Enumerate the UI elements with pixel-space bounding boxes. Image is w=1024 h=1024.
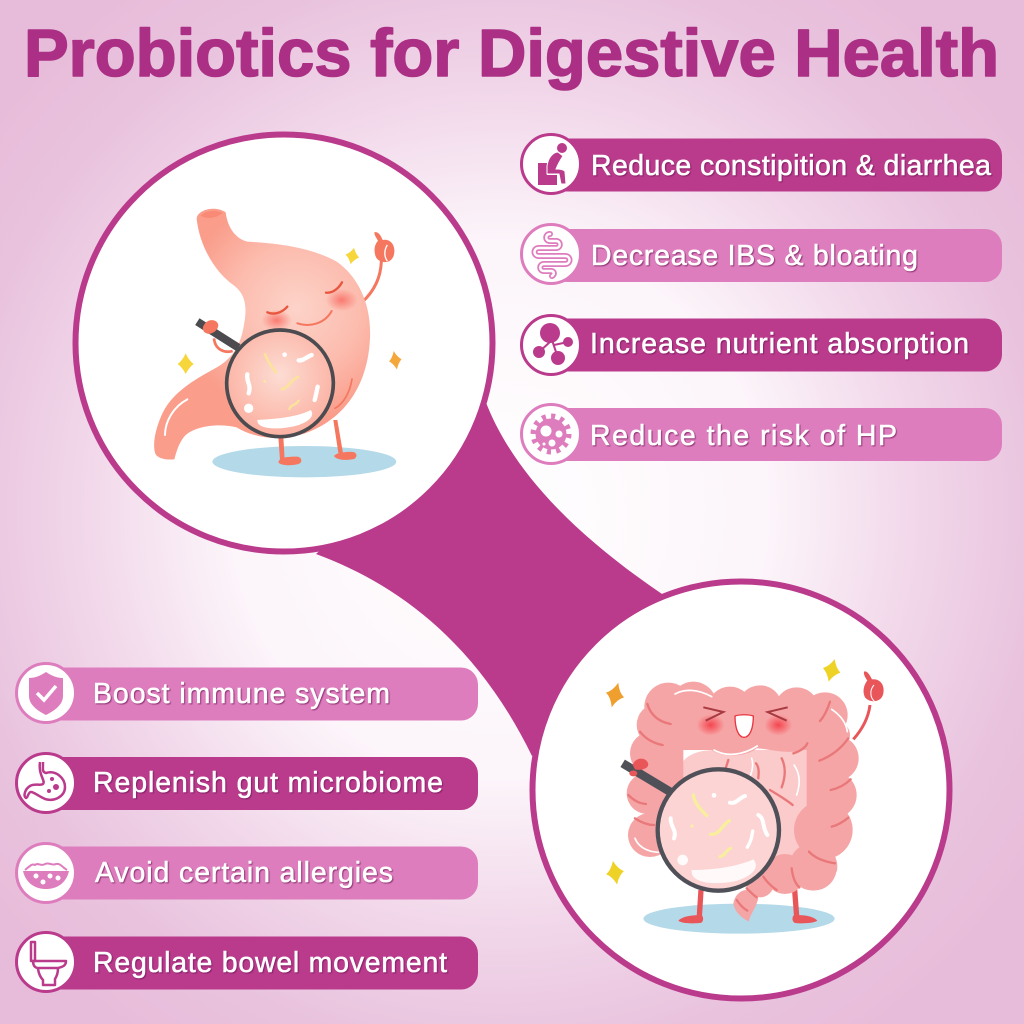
benefit: decrease IBS	[522, 224, 1002, 284]
face	[697, 707, 792, 737]
title: Probiotics for Digestive Health	[24, 16, 999, 91]
icon: toilet	[16, 932, 76, 992]
benefit: reduce risk of HP	[522, 404, 1002, 464]
raised arm with thumb up	[853, 671, 884, 739]
large intestine	[627, 682, 859, 922]
panel: intestine circle	[532, 582, 950, 998]
label: Regulate bowel movement	[93, 947, 447, 979]
icon: molecule	[522, 316, 580, 374]
benefit: boost immune system	[16, 664, 478, 722]
magnifying glass	[623, 759, 779, 891]
pill bar	[45, 757, 478, 810]
illustration: stomach character	[154, 209, 403, 477]
pill bar	[45, 668, 478, 720]
magnifying glass	[197, 322, 333, 437]
icon: shield	[16, 664, 76, 722]
benefit: increase nutrient absorption	[522, 316, 1002, 374]
hand holding glass	[203, 320, 233, 352]
pill bar	[550, 138, 1002, 192]
intestine highlights	[635, 690, 847, 891]
icon: intestines	[522, 224, 580, 284]
benefit: reduce constipation	[522, 134, 1002, 194]
label: Reduce the risk of HP	[590, 420, 897, 452]
legs and feet	[278, 420, 356, 465]
icon: stomach	[16, 754, 76, 812]
stomach body	[154, 209, 370, 460]
illustration: intestine character	[603, 657, 884, 934]
icon: allergy bowl	[16, 844, 76, 902]
raised arm with thumb up	[363, 232, 394, 302]
pill bar	[550, 229, 1002, 282]
connector between circles	[316, 400, 662, 756]
label: Avoid certain allergies	[95, 857, 393, 889]
label: Reduce constipition & diarrhea	[591, 150, 991, 182]
intestine fold marks	[628, 702, 851, 911]
ground shadow	[212, 446, 396, 477]
benefit: replenish gut microbiome	[16, 754, 478, 812]
legs and feet	[678, 890, 817, 923]
pill bar	[550, 318, 1002, 372]
label: Replenish gut microbiome	[93, 767, 443, 799]
pill bar	[550, 408, 1002, 461]
pill bar	[45, 936, 478, 990]
icon: person on toilet	[522, 134, 580, 194]
icon: virus	[522, 404, 580, 464]
benefit: regulate bowel movement	[16, 932, 478, 992]
pill bar	[45, 846, 478, 900]
small intestine	[678, 750, 813, 877]
sparkles	[603, 657, 843, 886]
label: Increase nutrient absorption	[590, 328, 969, 360]
benefit: avoid certain allergies	[16, 844, 478, 902]
label: Decrease IBS & bloating	[591, 240, 918, 272]
face	[261, 282, 358, 408]
sparkles	[178, 246, 403, 374]
ground shadow	[643, 904, 835, 934]
panel: stomach circle	[76, 134, 492, 552]
label: Boost immune system	[93, 678, 390, 710]
